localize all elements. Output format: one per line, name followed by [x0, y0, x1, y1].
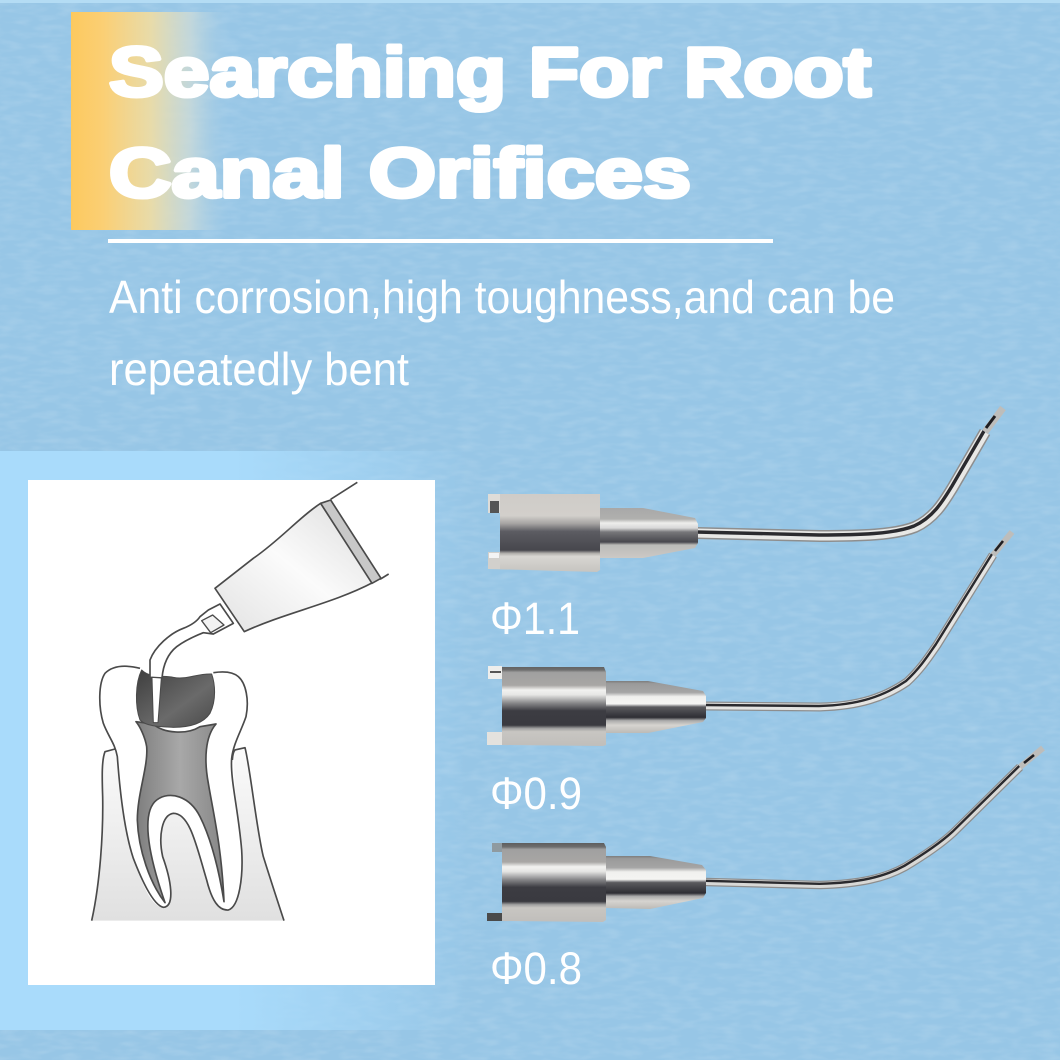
needle shaft	[705, 532, 1012, 707]
needle shaft	[705, 748, 1043, 885]
label: diameter 0.9: Φ0.9	[490, 768, 582, 819]
label: diameter 0.8: Φ0.8	[490, 943, 582, 994]
body	[488, 494, 600, 572]
collar	[600, 508, 698, 558]
subtitle text	[109, 271, 895, 395]
label: diameter 1.1: Φ1.1	[490, 593, 580, 644]
instrument: tip 0.8	[487, 748, 1043, 922]
subtitle text: Anti corrosion,high toughness,and can be	[109, 271, 895, 323]
icon: cavity access opening	[136, 670, 215, 727]
collar	[606, 681, 706, 733]
icon: tooth outline	[100, 666, 247, 910]
body	[492, 843, 606, 922]
orange gradient accent block	[71, 12, 231, 230]
title	[109, 33, 871, 212]
icon: ultrasonic tip	[150, 604, 233, 678]
title: Canal Orifices	[109, 134, 691, 212]
icon: jaw bone	[92, 748, 284, 921]
panel: illustration backing	[0, 451, 470, 1030]
title: Searching For Root	[109, 33, 871, 111]
body	[487, 666, 606, 746]
panel: tooth illustration	[28, 480, 435, 985]
instrument: tip 0.9	[487, 532, 1012, 746]
subtitle text: repeatedly bent	[109, 343, 409, 395]
collar	[606, 856, 706, 909]
instrument: tip 1.1	[488, 408, 1003, 572]
divider rule under title	[108, 239, 773, 243]
icon: handpiece body	[215, 482, 389, 632]
needle shaft	[696, 408, 1003, 536]
icon: pulp chamber and canals	[136, 722, 224, 903]
